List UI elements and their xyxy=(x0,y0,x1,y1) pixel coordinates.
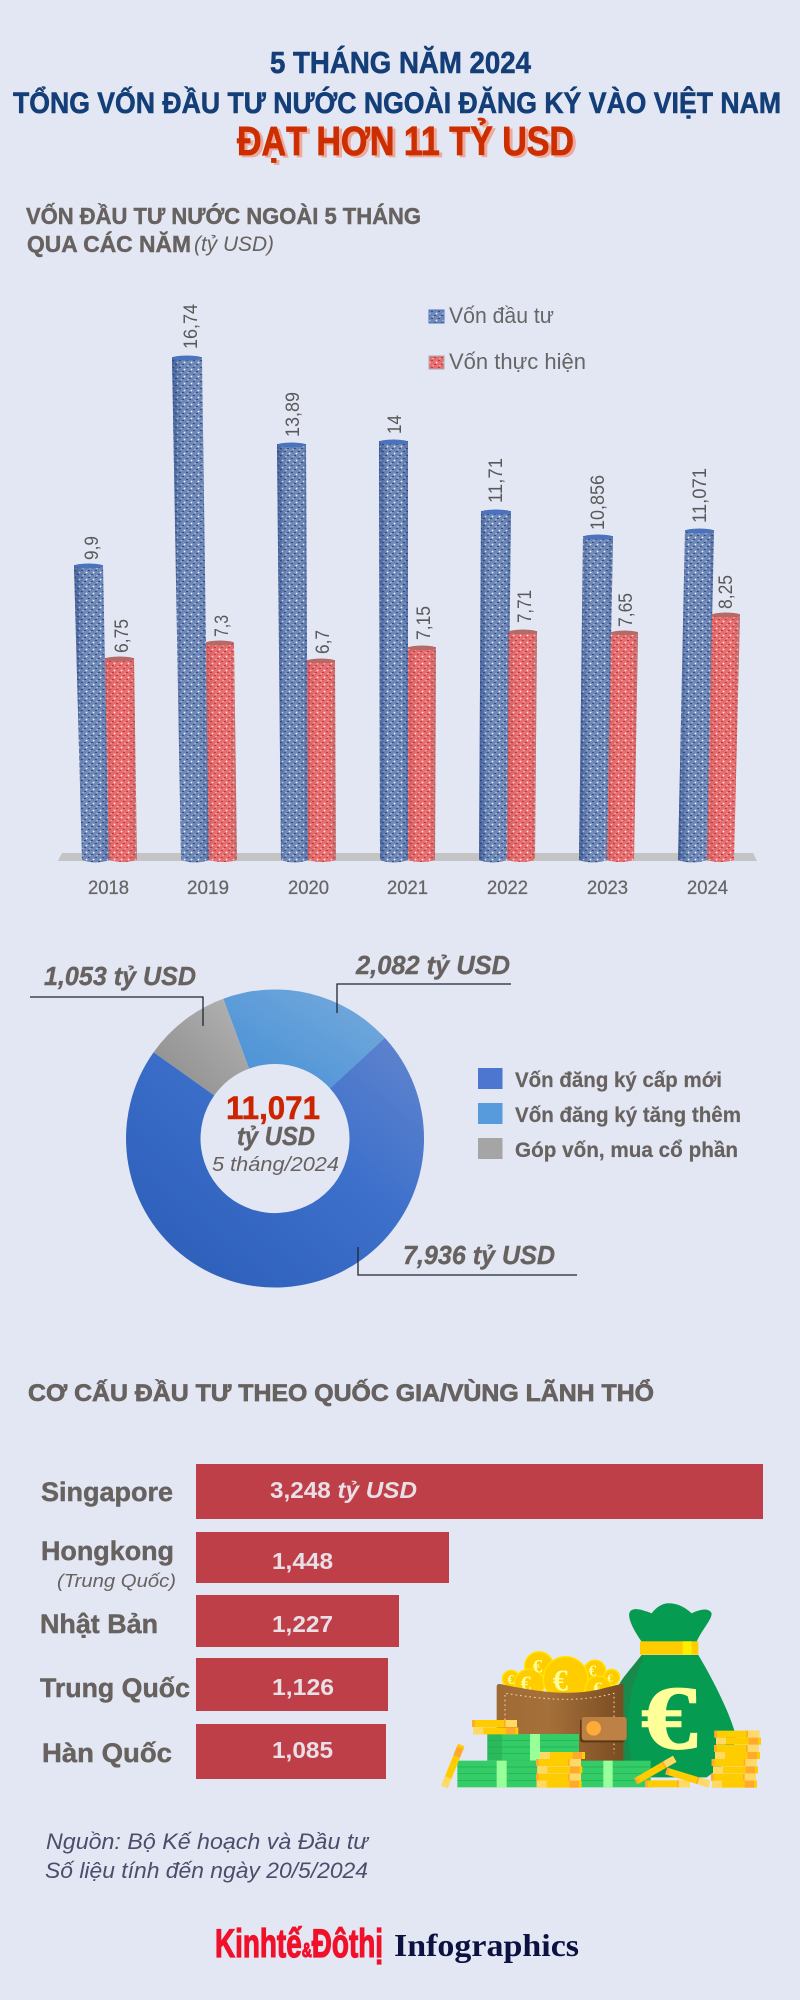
coin stacks xyxy=(441,1720,761,1788)
donut centre total: 11,071 xyxy=(226,1090,320,1126)
chart legend: Vốn đầu tư xyxy=(449,303,554,328)
donut legend: Vốn đăng ký cấp mới xyxy=(515,1069,722,1092)
bar value labels: 7,65 xyxy=(616,593,637,627)
callout: 7,936 xyxy=(358,1240,577,1275)
logo: Kinh tế & Đô thị Infographics xyxy=(215,1922,579,1966)
row: Singapore: 3,248 tỷ USD xyxy=(270,1477,417,1503)
year axis labels: 2018 xyxy=(88,878,129,899)
2023 bars xyxy=(579,534,638,862)
callout: 2,082 xyxy=(337,950,511,1013)
banknote stacks xyxy=(457,1734,651,1787)
coins in wallet: € xyxy=(553,1664,568,1698)
section heading: foreign investment over the years xyxy=(26,202,421,257)
row: Trung Quốc xyxy=(40,1658,388,1711)
donut legend: Góp vốn, mua cổ phần xyxy=(515,1139,738,1162)
source note: Số liệu tính đến ngày 20/5/2024 xyxy=(45,1858,368,1883)
donut legend: Vốn đăng ký tăng thêm xyxy=(515,1104,741,1127)
bar value labels xyxy=(82,304,737,654)
logo: Kinh tế & Đô thị Infographics: Kinhtế&Đôthị xyxy=(215,1922,383,1966)
donut centre total xyxy=(212,1090,339,1176)
coins in wallet: € xyxy=(521,1674,532,1696)
bar value labels: 14 xyxy=(385,415,406,434)
row: Trung Quốc: 1,126 xyxy=(272,1674,334,1700)
bar value labels: 7,3 xyxy=(212,615,233,637)
chart floor xyxy=(58,853,757,861)
bar value labels: 10,856 xyxy=(588,475,609,530)
year axis labels: 2020 xyxy=(288,878,329,899)
section heading: foreign investment over the years: QUA CÁC NĂM xyxy=(27,230,191,257)
2018 bars xyxy=(74,564,137,862)
coins in wallet: € xyxy=(507,1672,514,1687)
row: Hàn Quốc xyxy=(42,1724,386,1779)
bar value labels: 7,71 xyxy=(515,590,536,623)
row: Hàn Quốc: Hàn Quốc xyxy=(42,1738,172,1768)
wallet xyxy=(497,1683,627,1762)
bar value labels: 16,74 xyxy=(181,304,202,349)
callout: 1,053 xyxy=(30,961,203,1026)
row: Hongkong: 1,448 xyxy=(272,1548,333,1574)
donut legend xyxy=(478,1068,741,1162)
icon: euro money bag, wallet, coins and banknotes xyxy=(441,1603,761,1788)
chart legend: Vốn thực hiện xyxy=(449,349,586,374)
callout: 2,082: 2,082 tỷ USD xyxy=(355,950,510,980)
callout: 1,053: 1,053 tỷ USD xyxy=(44,961,196,991)
chart legend xyxy=(429,303,586,374)
coins in wallet: € xyxy=(533,1657,543,1678)
2021 bars xyxy=(379,440,436,862)
coins in wallet: € xyxy=(607,1674,613,1685)
money bag xyxy=(617,1603,736,1777)
source note: Nguồn: Bộ Kế hoạch và Đầu tư xyxy=(46,1829,370,1854)
panel: country bars xyxy=(40,1464,763,1779)
money bag: € xyxy=(641,1669,697,1768)
bar value labels: 8,25 xyxy=(716,575,737,609)
2019 bars xyxy=(172,356,237,862)
slice: additional capital xyxy=(223,989,385,1088)
bar value labels: 11,71 xyxy=(486,458,507,503)
row: Nhật Bản: Nhật Bản xyxy=(40,1609,158,1639)
row: Hongkong: Hongkong xyxy=(41,1536,174,1566)
year axis labels: 2023 xyxy=(587,878,628,899)
bar value labels: 13,89 xyxy=(283,392,304,437)
2020 bars xyxy=(277,442,336,862)
logo: Kinh tế & Đô thị Infographics: Infographics xyxy=(394,1927,579,1963)
callout: 7,936: 7,936 tỷ USD xyxy=(403,1240,555,1270)
title: ĐẠT HƠN 11 TỶ USD xyxy=(237,118,574,164)
row: Trung Quốc: Trung Quốc xyxy=(40,1673,190,1703)
slice: new registered capital xyxy=(126,1038,424,1288)
bar value labels: 9,9 xyxy=(82,536,103,560)
row: Nhật Bản: 1,227 xyxy=(272,1611,333,1637)
row: Nhật Bản xyxy=(40,1595,399,1647)
year axis labels: 2022 xyxy=(487,878,528,899)
source note xyxy=(45,1829,370,1883)
donut centre total: 5 tháng/2024 xyxy=(212,1154,339,1176)
donut chart xyxy=(126,989,424,1288)
row: Hongkong xyxy=(41,1532,449,1591)
title xyxy=(13,45,781,164)
row: Hàn Quốc: 1,085 xyxy=(272,1737,333,1763)
donut centre total: tỷ USD xyxy=(237,1121,315,1151)
title: 5 THÁNG NĂM 2024 xyxy=(270,45,532,80)
coins in wallet: € xyxy=(589,1663,597,1680)
2022 bars xyxy=(479,510,537,862)
row: Hongkong: (Trung Quốc) xyxy=(57,1571,176,1591)
year axis labels xyxy=(88,878,728,899)
bar value labels: 6,75 xyxy=(112,619,133,653)
row: Singapore: Singapore xyxy=(41,1477,173,1507)
section heading: foreign investment over the years: (tỷ USD) xyxy=(194,233,274,256)
coins in wallet: € xyxy=(593,1678,602,1697)
chart: cylinder bars by year xyxy=(58,303,757,899)
row: Singapore xyxy=(41,1464,763,1519)
coins in wallet xyxy=(502,1652,620,1702)
year axis labels: 2024 xyxy=(687,878,728,899)
section heading: foreign investment over the years: VỐN ĐẦU TƯ NƯỚC NGOÀI 5 THÁNG xyxy=(26,202,421,229)
bar value labels: 6,7 xyxy=(313,630,334,654)
year axis labels: 2019 xyxy=(187,878,229,899)
year axis labels: 2021 xyxy=(387,878,428,899)
slice: capital contribution xyxy=(154,999,249,1095)
bar value labels: 11,071 xyxy=(690,468,711,523)
bar value labels: 7,15 xyxy=(414,606,435,640)
2024 bars xyxy=(678,528,740,862)
section heading: by country: CƠ CẤU ĐẦU TƯ THEO QUỐC GIA/VÙNG LÃNH THỔ xyxy=(28,1379,654,1407)
